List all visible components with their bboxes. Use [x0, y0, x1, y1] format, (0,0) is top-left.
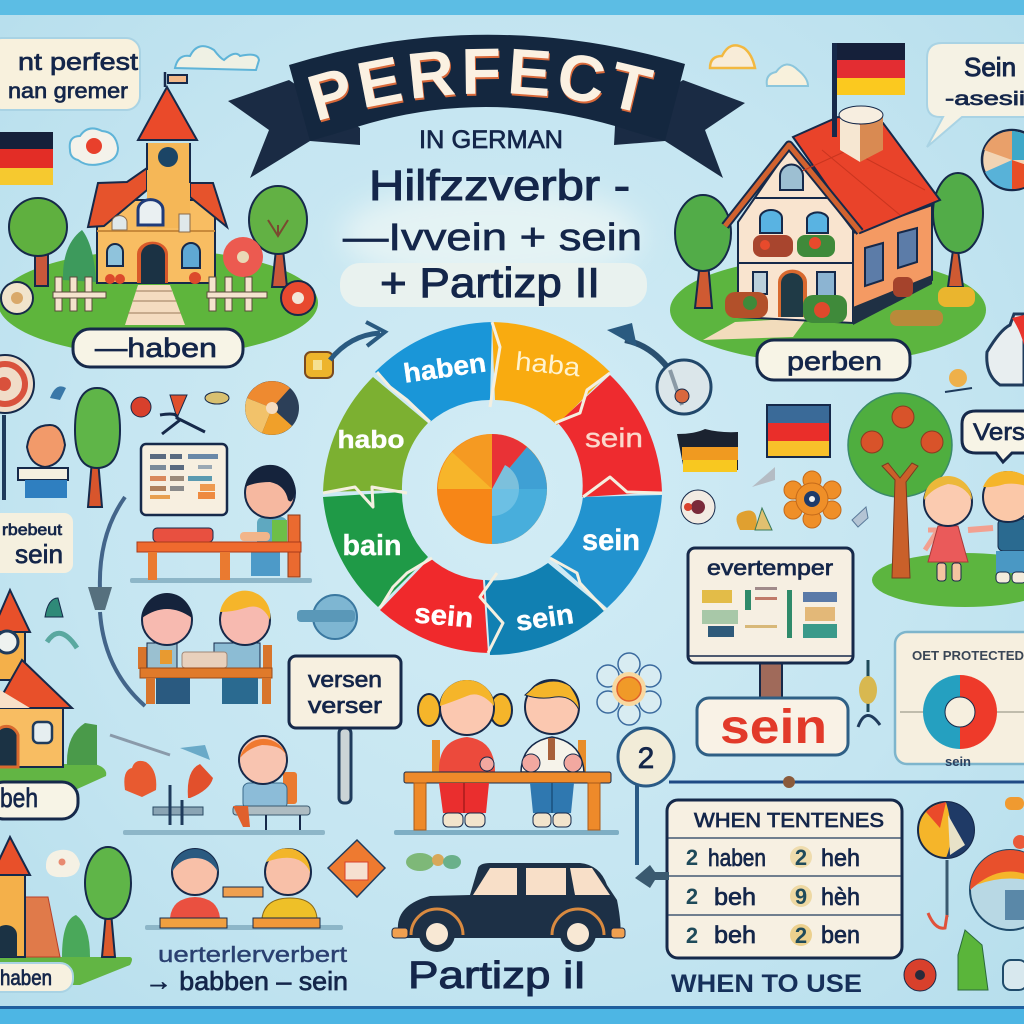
cream path [703, 318, 807, 340]
fences [53, 277, 267, 311]
connector [669, 776, 1024, 788]
sign: board with sein: evertemper [707, 557, 833, 580]
label: perben [757, 340, 910, 380]
flowers [1, 237, 315, 315]
illustration: figure far right [987, 314, 1024, 385]
girl [924, 476, 993, 581]
text: verben formula [145, 942, 348, 996]
panel: church lower left [0, 590, 106, 790]
illustration: tree and children [848, 393, 1024, 607]
icon: number 2: 2 [638, 742, 654, 775]
illustration: two children bottom [145, 848, 343, 930]
tree left [675, 195, 731, 308]
icon: small yellow [305, 352, 333, 378]
arrow: left curved [88, 497, 145, 706]
car [392, 863, 625, 952]
boy [983, 471, 1024, 583]
panel: when tentenses table: WHEN TENTENES [694, 810, 884, 832]
label: when to use: WHEN TO USE [671, 970, 862, 998]
label: haben [73, 329, 243, 367]
callout: sein left [0, 513, 73, 573]
flag: second [767, 405, 830, 457]
heading: haben + sein: —Ivvein + sein [343, 217, 642, 259]
label: perben: perben [787, 346, 882, 376]
icon: target [0, 355, 34, 500]
icon: orange wheel [245, 381, 299, 435]
panel: when tentenses table: 2 [795, 923, 807, 948]
panel: when tentenses table: 2 [686, 884, 698, 909]
chart: central wheel: sein [514, 598, 576, 637]
chart: central wheel: habo [338, 426, 404, 454]
tree left [9, 198, 67, 286]
icon: small colourful [406, 853, 461, 871]
text: verben formula: uerterlerverbert [158, 942, 347, 967]
walls [738, 147, 932, 325]
sign: board with sein [688, 548, 853, 755]
flag: left middle [677, 429, 738, 472]
pill: Partizip II [340, 259, 647, 307]
illustration: red flowers and desk [110, 735, 213, 825]
roof [725, 117, 940, 233]
panel: pie card: sein [945, 754, 971, 769]
panel: when tentenses table: heh [821, 845, 860, 872]
illustration: two children at central table [394, 680, 619, 835]
sign: verser: versen [308, 667, 382, 692]
flag [832, 43, 905, 137]
icon: flowers and gear [681, 467, 868, 530]
arrow: to table [635, 865, 669, 888]
label: beh: beh [0, 783, 38, 813]
chart: central wheel: sein [585, 423, 643, 453]
tree right [933, 173, 983, 287]
panel: church with haben [0, 72, 318, 356]
clouds top [710, 45, 808, 86]
chart: central wheel: sein [582, 524, 640, 557]
chimney [839, 106, 883, 162]
sign: board with sein: sein [720, 701, 827, 754]
sign: verser [289, 656, 401, 803]
pill: Partizip II: + Partizp II [380, 259, 600, 306]
label: haben bottom left [0, 963, 73, 992]
icon: flower [597, 653, 661, 725]
chart: central wheel: sein [413, 598, 475, 634]
panel: when tentenses table: beh [714, 922, 756, 949]
callout: top left: nan gremer [8, 80, 128, 103]
label: haben: —haben [95, 333, 217, 363]
bush [63, 230, 96, 282]
icon: plane [297, 595, 357, 639]
icon: number 2 [618, 728, 674, 865]
icon: balloon [918, 802, 974, 928]
icon: bug and kite [131, 392, 229, 434]
chart: centre pie [437, 434, 547, 544]
windows [753, 164, 917, 296]
illustration: two children at table [138, 591, 272, 704]
panel: pie card: OET PROTECTED [912, 648, 1024, 663]
callout: Vers [962, 411, 1024, 462]
callout: Sein [927, 43, 1024, 147]
church building [88, 72, 227, 284]
chart: central wheel: haben [402, 347, 488, 389]
tree right [249, 186, 307, 287]
icon: small blue [50, 386, 66, 400]
icon: flower cloud [70, 128, 118, 165]
board: notes [141, 444, 227, 515]
callout: Sein: -asesii [945, 89, 1024, 110]
icons: small [45, 598, 77, 648]
icon: plants [904, 930, 1024, 991]
illustration: child at desk [130, 465, 312, 583]
panel: when tentenses table: 2 [795, 845, 807, 870]
panel: when tentenses table: haben [708, 845, 766, 872]
panel: when tentenses table [667, 800, 902, 958]
icon: plant [858, 660, 880, 727]
icon: colour wheel top right [982, 130, 1024, 190]
callout: sein left: sein [15, 539, 63, 569]
flag: Germany left [0, 132, 53, 185]
callout: Sein: Sein [964, 52, 1016, 82]
text: verben formula: → babben – sein [145, 966, 348, 996]
chart: central wheel: haba [514, 346, 582, 382]
panel: when tentenses table: 2 [686, 845, 698, 870]
panel: when tentenses table: beh [714, 884, 756, 911]
flower boxes [725, 235, 847, 323]
callout: sein left: rbebeut [2, 522, 63, 539]
panel: when tentenses table: ben [821, 922, 860, 949]
door [778, 270, 807, 317]
panel: house with flag [670, 43, 986, 363]
label: Partizip II: Partizp iI [408, 955, 586, 997]
garden flowers [890, 277, 975, 326]
panel: when tentenses table: 9 [795, 884, 807, 909]
callout: top left: nt perfest [18, 49, 138, 76]
icon: person on pedestal [18, 425, 68, 498]
icon: diamond [328, 840, 385, 897]
icon: small yellow right [945, 369, 972, 392]
panel: when tentenses table: 2 [686, 923, 698, 948]
subtitle: in German: IN GERMAN [419, 126, 563, 154]
heading: Hilfsverb: Hilfzzverbr - [369, 162, 630, 210]
label: haben bottom left: haben [0, 967, 52, 990]
arrow: upper right with dial [607, 323, 711, 414]
panel: small church bottom left [0, 837, 132, 985]
title banner [228, 34, 745, 178]
panel: when tentenses table: hèh [821, 884, 860, 911]
callout: top left [0, 38, 140, 110]
icon: tree [75, 388, 120, 507]
label: beh [0, 782, 78, 819]
sign: verser: verser [308, 693, 382, 718]
callout: Vers: Vers [973, 419, 1024, 446]
path [125, 285, 185, 325]
cloud [175, 46, 259, 70]
icon: umbrella scene [970, 797, 1024, 930]
chart: central wheel [323, 322, 662, 655]
illustration: child writing [123, 736, 325, 835]
arrow: upper [330, 322, 385, 360]
panel: pie card [895, 632, 1024, 769]
chart: central wheel: bain [342, 530, 402, 562]
title banner: PERFECT [308, 48, 656, 122]
